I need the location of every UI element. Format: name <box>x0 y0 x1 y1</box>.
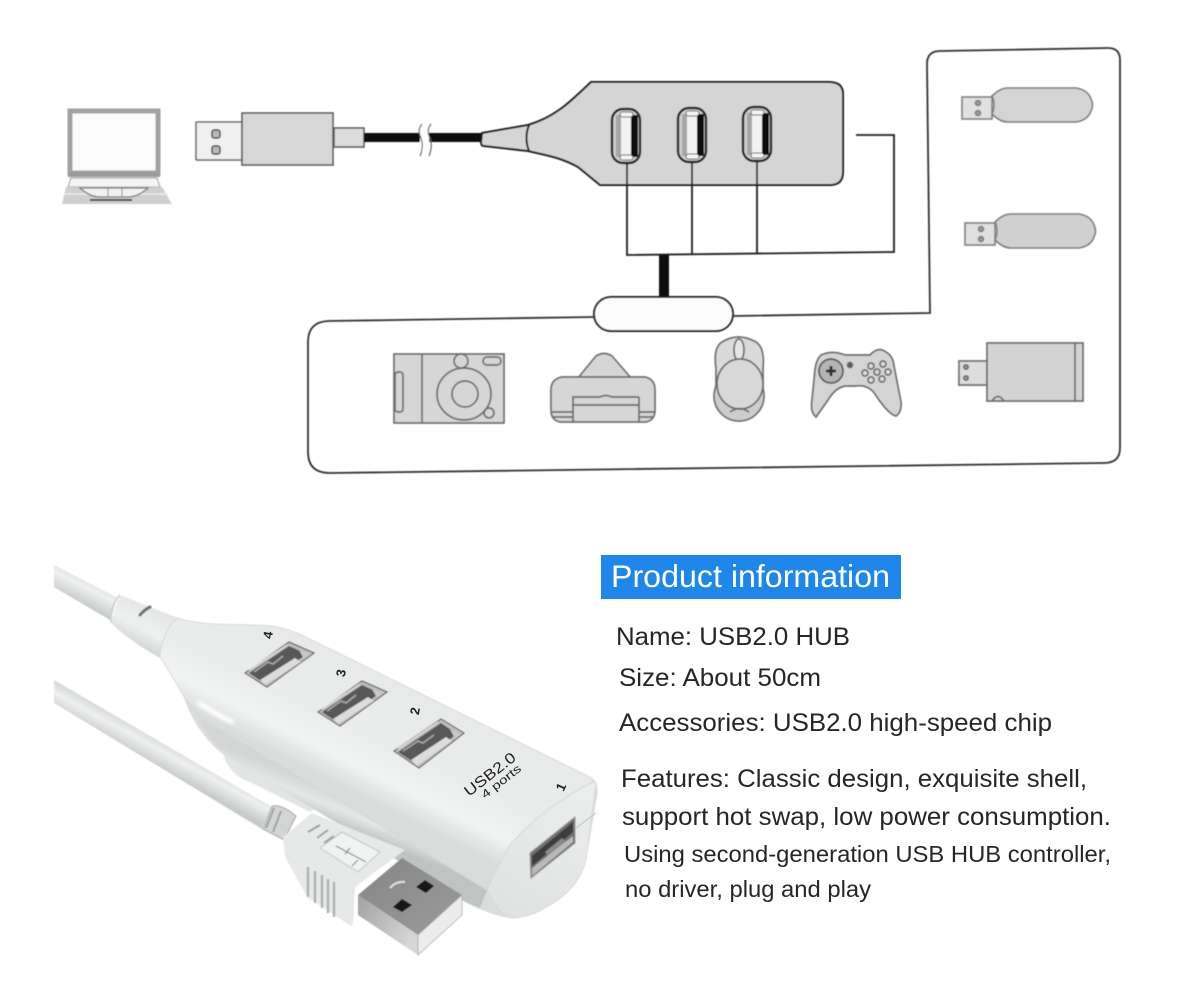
port numbers and model label: 2 <box>407 706 423 716</box>
icon: flash drive middle <box>965 214 1096 248</box>
port numbers and model label: 4 ports <box>479 763 524 801</box>
text block: product specifications: Accessories: USB2.0 high-speed chip <box>619 709 1052 737</box>
USB port 4 opening <box>245 642 314 687</box>
USB plug metal tip <box>358 858 462 955</box>
USB port 1 opening <box>530 817 575 878</box>
icon: armchair device <box>551 354 655 422</box>
USB port 3 opening <box>318 681 387 726</box>
USB port 1 <box>612 109 640 163</box>
icon: gamepad <box>812 350 901 417</box>
text block: product specifications: no driver, plug and play <box>625 876 871 902</box>
icon: laptop <box>62 111 172 204</box>
product photo: white USB hub <box>54 565 598 955</box>
hub body <box>160 618 598 918</box>
text block: product specifications: Size: About 50cm <box>619 664 821 692</box>
device outline frame <box>308 48 1120 473</box>
hub body <box>481 82 843 185</box>
USB port 2 <box>678 108 706 162</box>
port numbers and model label: 3 <box>333 668 349 678</box>
connector lines <box>627 135 894 297</box>
USB port 3 <box>743 107 771 161</box>
hub shadow underside <box>222 745 340 812</box>
text block: product specifications: Features: Classic design, exquisite shell, <box>621 765 1087 793</box>
text block: product specifications: Name: USB2.0 HUB <box>616 623 850 651</box>
heading: Product information: Product information <box>611 558 890 594</box>
icon: USB plug and cable <box>196 113 482 165</box>
junction pill <box>594 297 733 331</box>
icon: mouse <box>714 337 764 421</box>
USB plug white housing <box>263 806 405 926</box>
upper cable <box>54 565 178 658</box>
icon: camera <box>394 354 504 423</box>
port numbers and model label: 1 <box>553 781 569 793</box>
text block: product specifications: support hot swap, low power consumption. <box>622 803 1111 831</box>
top face <box>160 618 593 890</box>
connection diagram <box>62 48 1120 473</box>
text block: product specifications <box>616 623 1111 902</box>
text block: product specifications: Using second-generation USB HUB controller, <box>624 841 1111 867</box>
port numbers and model label: USB2.0 <box>461 749 520 800</box>
body highlight <box>199 703 232 722</box>
port numbers and model label <box>260 629 569 801</box>
icon: flash drive top <box>962 88 1092 122</box>
icon: card reader <box>959 343 1083 401</box>
lower cable <box>54 680 272 829</box>
side band <box>197 717 487 908</box>
USB port 2 opening <box>394 719 464 768</box>
port numbers and model label: 4 <box>260 629 276 640</box>
front cap <box>487 782 596 918</box>
